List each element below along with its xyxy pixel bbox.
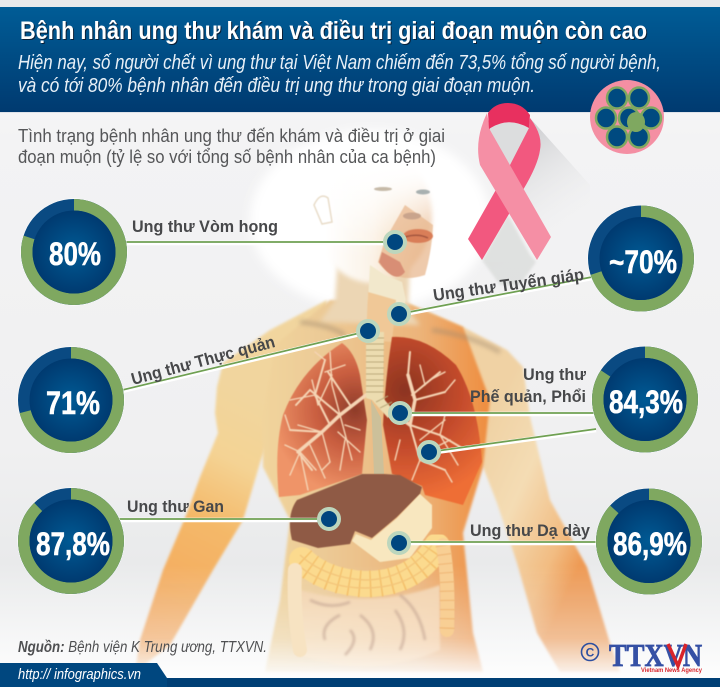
chart description: đoạn muộn (tỷ lệ so với tổng số bệnh nhân của ca bệnh) <box>18 147 436 167</box>
marker dots <box>319 232 439 553</box>
label: Phế quản, Phổi: Ung thư <box>523 365 587 384</box>
donut: Gan 87,8% <box>18 488 124 594</box>
torso <box>262 300 490 672</box>
donut: Thực quản 71%: 71% <box>46 385 100 421</box>
top strip <box>0 0 720 7</box>
left arm <box>135 300 327 672</box>
label: Vòm họng: Ung thư Vòm họng <box>132 217 278 236</box>
icon: cable cross-section <box>590 80 664 154</box>
header band <box>0 7 720 112</box>
esophagus <box>366 292 396 342</box>
shoulder shading <box>300 322 500 352</box>
donut: Dạ dày 86,9% <box>596 488 702 595</box>
chart description <box>18 126 445 167</box>
neck <box>321 266 420 327</box>
mouth interior <box>379 252 405 277</box>
logo: TTXVN: C <box>586 646 595 660</box>
ribbon light strand <box>478 113 551 260</box>
donut: Phế quản, Phổi 84,3% <box>592 346 698 453</box>
label: Dạ dày: Ung thư Dạ dày <box>470 521 591 540</box>
icon: pink ribbon <box>468 103 590 285</box>
title: Bệnh nhân ung thư khám và điều trị giai đoạn muộn còn cao <box>20 17 647 45</box>
stomach <box>352 494 432 562</box>
anatomy illustration <box>135 130 620 672</box>
right arm <box>407 303 620 672</box>
donut: Dạ dày 86,9%: 86,9% <box>613 526 687 562</box>
subtitle: và có tới 80% bệnh nhân đến điều trị ung thư trong giai đoạn muộn. <box>18 75 535 97</box>
footer bar <box>0 663 720 687</box>
trachea <box>366 332 395 418</box>
intestine folds <box>310 595 425 655</box>
ribbon lower shadow <box>482 215 536 285</box>
donut: Vòm họng 80% <box>20 198 128 306</box>
header divider <box>0 112 720 113</box>
website url: http:// infographics.vn <box>18 666 141 683</box>
lung branches <box>285 352 462 490</box>
label: Gan: Ung thư Gan <box>127 497 224 516</box>
small intestine <box>300 585 440 666</box>
face <box>314 187 433 278</box>
logo: TTXVN <box>582 637 702 674</box>
label: Phế quản, Phổi: Phế quản, Phổi <box>470 387 586 406</box>
body silhouette <box>135 147 620 672</box>
head top fade <box>300 160 450 235</box>
esophagus lower <box>371 400 384 474</box>
donut: Thực quản 71% <box>18 346 124 454</box>
donut: Tuyến giáp ~70% <box>588 205 694 312</box>
logo: TTXVN: Vietnam News Agency <box>641 667 702 674</box>
liver <box>290 474 422 548</box>
larynx <box>368 265 406 322</box>
ribbon top loop <box>488 103 530 129</box>
donut: Vòm họng 80%: 80% <box>49 236 101 272</box>
ribbon shadow <box>482 118 590 285</box>
colon <box>295 545 448 650</box>
connector lines <box>115 242 598 543</box>
left lung <box>277 343 367 497</box>
logo: TTXVN: TTXVN <box>609 637 702 673</box>
source: Nguồn: Bệnh viện K Trung ương, TTXVN. <box>18 639 267 656</box>
label: Phế quản, Phổi <box>470 365 587 406</box>
donut: Gan 87,8%: 87,8% <box>36 526 110 562</box>
chart description: Tình trạng bệnh nhân ung thư đến khám và điều trị ở giai <box>18 126 445 146</box>
subtitle <box>18 52 661 97</box>
donut: Phế quản, Phổi 84,3%: 84,3% <box>609 384 683 420</box>
head <box>336 184 434 285</box>
label: Thực quản: Ung thư Thực quản <box>129 332 277 389</box>
donut: Tuyến giáp ~70%: ~70% <box>609 244 677 280</box>
white glow behind head <box>250 130 490 310</box>
right lung <box>383 337 482 505</box>
ribbon loop interior <box>489 122 529 168</box>
label: Tuyến giáp: Ung thư Tuyến giáp <box>432 265 585 305</box>
ribbon dark strand <box>468 118 541 260</box>
